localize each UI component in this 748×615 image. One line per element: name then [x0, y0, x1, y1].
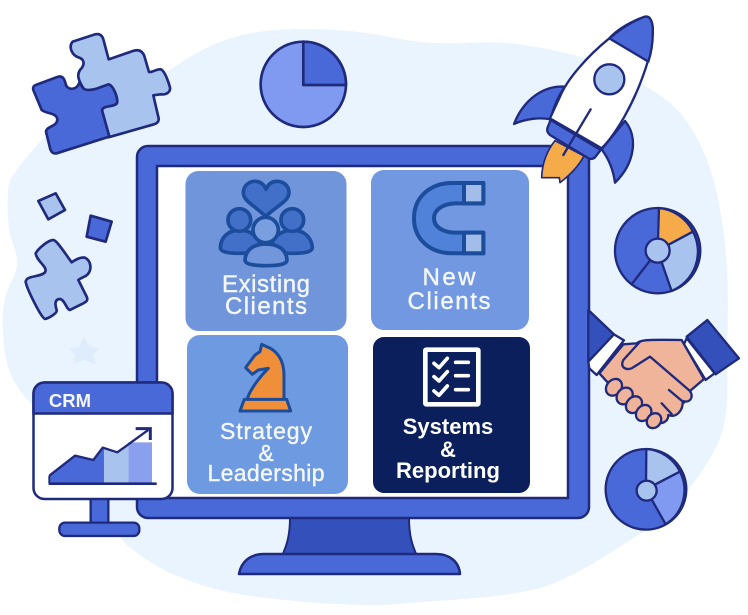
monitor stand base [239, 554, 460, 574]
area chart with arrow [49, 429, 157, 484]
card title: CRM [49, 390, 91, 411]
label: New Clients [408, 264, 490, 315]
icon: handshake [588, 310, 739, 431]
monitor frame [137, 146, 589, 518]
monitor [137, 146, 589, 574]
icon: pie chart top [261, 42, 346, 127]
label: Existing Clients: Existing [222, 271, 310, 298]
icon: puzzle pieces [33, 34, 170, 153]
card stand [59, 498, 139, 536]
label: Strategy & Leadership: & [258, 440, 274, 466]
light puzzle piece [71, 34, 170, 137]
icon: segmented pie lower right [606, 449, 686, 530]
thumb and finger lines [622, 342, 690, 414]
label: Strategy & Leadership [208, 418, 324, 486]
rocket left fin [514, 87, 565, 124]
monitor screen [157, 166, 568, 498]
sleeves and cuffs [588, 310, 739, 380]
rocket base band [547, 120, 601, 159]
panel: Strategy & Leadership [187, 335, 348, 494]
icon: chess knight [240, 344, 291, 411]
small puzzle piece [26, 240, 90, 319]
icon: checklist [425, 350, 478, 404]
label: Systems & Reporting: Reporting [396, 458, 500, 483]
label: Systems & Reporting [396, 414, 500, 483]
label: New Clients: Clients [408, 288, 490, 315]
label: Existing Clients: Clients [225, 293, 307, 320]
rocket window [594, 64, 624, 94]
rocket center line [563, 109, 591, 155]
CRM card [34, 382, 172, 536]
rocket right fin [602, 121, 633, 183]
rocket flame [542, 141, 584, 183]
label: Strategy & Leadership: Strategy [220, 418, 312, 444]
icon: segmented pie right [615, 208, 700, 293]
icon: small squares and puzzle piece [26, 193, 112, 319]
hands [599, 340, 704, 431]
label: Systems & Reporting: Systems [403, 414, 493, 439]
label: Strategy & Leadership: Leadership [208, 460, 324, 486]
icon: faint star [69, 337, 100, 364]
panel: Existing Clients [186, 171, 346, 331]
label: New Clients: New [422, 264, 476, 291]
monitor stand neck [282, 518, 417, 556]
rocket body [550, 17, 653, 148]
small dark square [87, 216, 112, 242]
icon: magnet [414, 183, 483, 253]
card body [34, 382, 172, 499]
rocket nose [609, 17, 653, 62]
dark puzzle piece [33, 77, 117, 153]
icon: clients with heart [220, 181, 312, 266]
label: Systems & Reporting: & [440, 437, 456, 462]
card header [34, 382, 172, 414]
panel: Systems & Reporting [373, 337, 530, 493]
panel: New Clients [371, 170, 529, 330]
small light square [38, 193, 65, 219]
icon: rocket [514, 17, 653, 183]
label: Existing Clients [222, 271, 310, 320]
fingers [603, 376, 664, 431]
